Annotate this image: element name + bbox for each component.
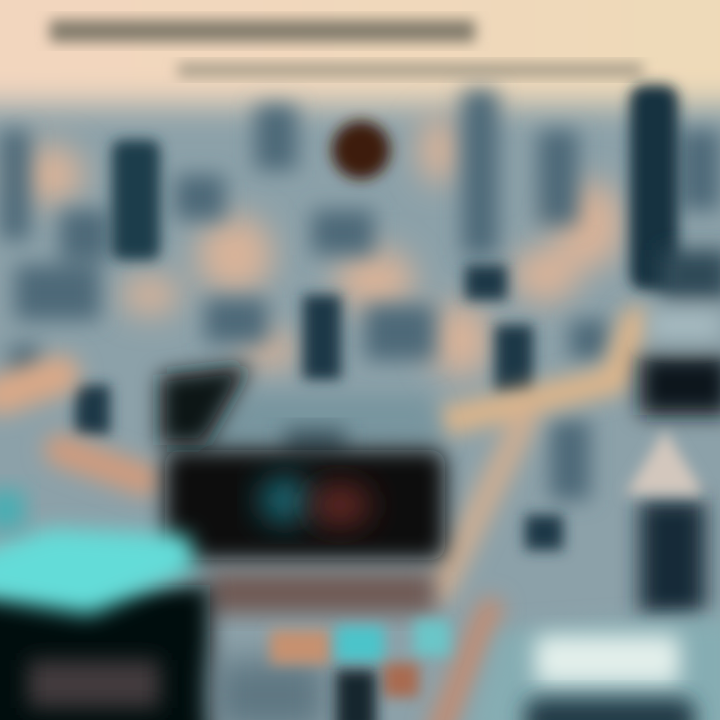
central building: roof bbox=[190, 395, 445, 450]
bottom-left: dark body bbox=[0, 585, 210, 720]
icon: brown sphere bbox=[332, 121, 390, 179]
block: dark tower bbox=[336, 670, 376, 720]
plaza: teal ground bbox=[465, 615, 720, 720]
bottom-left: cyan roof bbox=[0, 528, 195, 615]
central building: red light bbox=[310, 485, 370, 525]
block: rust bbox=[383, 663, 419, 697]
bottom-centre blocks bbox=[215, 620, 450, 720]
title: illegible blurred heading bbox=[50, 20, 475, 42]
mid-ground: slate buildings bbox=[0, 90, 720, 500]
block: cyan left bbox=[336, 626, 384, 662]
sky band bbox=[0, 0, 720, 105]
right block: dark building bbox=[640, 250, 720, 615]
mid-ground: peach patches bbox=[16, 116, 624, 378]
band below central building bbox=[210, 572, 435, 614]
bottom-left building bbox=[0, 490, 210, 720]
subtitle: illegible blurred line bbox=[178, 63, 643, 77]
block: peach bbox=[270, 630, 330, 664]
block: cyan right bbox=[414, 620, 450, 656]
central building: roof ridge bbox=[285, 428, 345, 454]
bottom-right plaza bbox=[465, 615, 720, 720]
tower: right bbox=[630, 85, 678, 290]
central building: dark body bbox=[165, 450, 445, 560]
plaza: white roof bbox=[535, 635, 680, 685]
central building: teal light bbox=[261, 478, 309, 522]
mid-ground: dark towers bbox=[75, 265, 563, 550]
right block: pale roof bbox=[625, 430, 705, 495]
tower: left bbox=[112, 140, 160, 260]
bottom-left: grey window bbox=[28, 660, 160, 708]
central building: dark left wing bbox=[160, 365, 250, 445]
plaza: dark roof edge bbox=[525, 698, 695, 720]
roads: peach diagonal bbox=[0, 320, 635, 720]
block: slate ground bbox=[215, 660, 325, 720]
central building bbox=[160, 365, 445, 560]
bottom-left: cyan edge bbox=[0, 490, 25, 530]
